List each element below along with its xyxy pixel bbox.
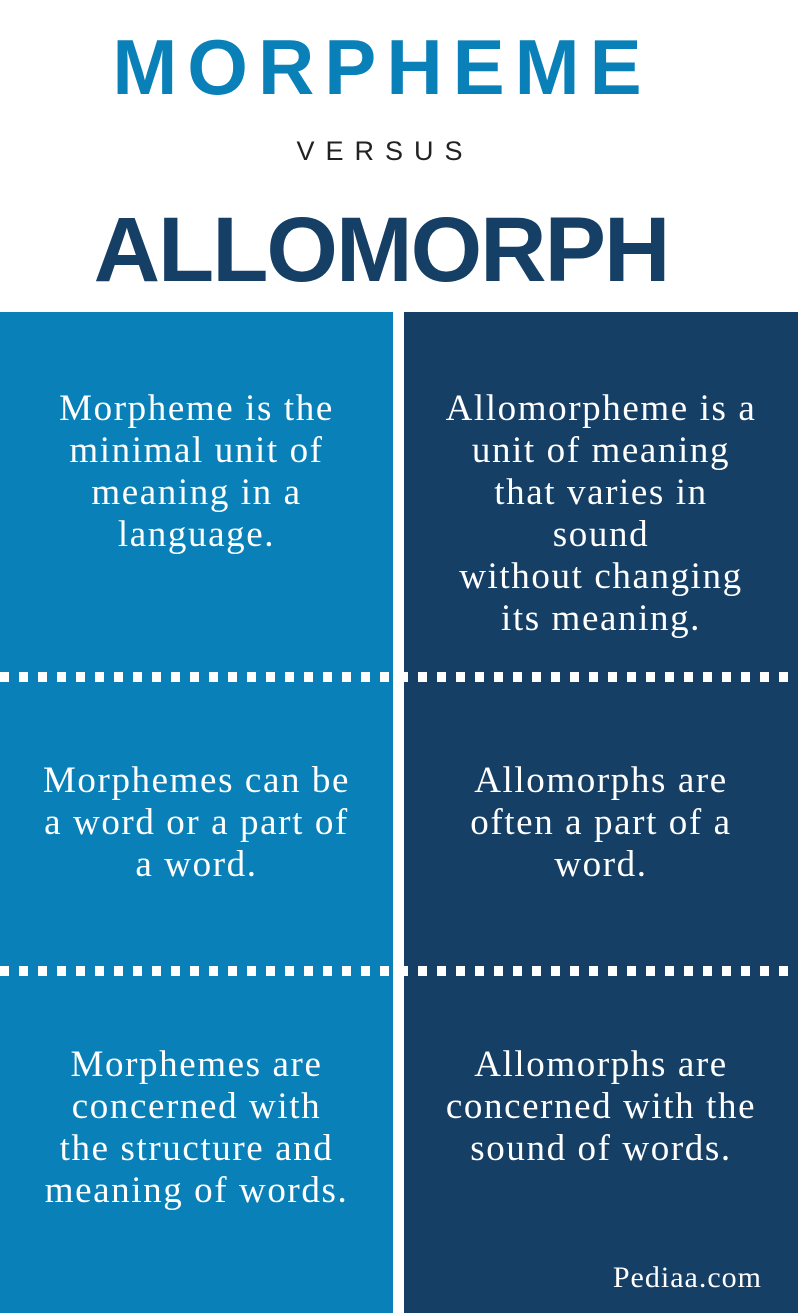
text: allomorph concern [446, 1044, 756, 1169]
text: allomorph definition: sound [553, 514, 649, 555]
text: morpheme concern: the structure and [60, 1128, 333, 1169]
text: morpheme concern [45, 1044, 348, 1211]
text: morpheme concern: meaning of words. [45, 1170, 348, 1211]
text: allomorph concern: concerned with the [446, 1086, 756, 1127]
text: allomorph definition: its meaning. [501, 598, 701, 639]
text: morpheme word: Morphemes can be [43, 760, 350, 801]
text: allomorph definition: that varies in [494, 472, 708, 513]
text: morpheme definition: meaning in a [91, 472, 302, 513]
text: allomorph definition: unit of meaning [472, 430, 730, 471]
text: allomorph definition: Allomorpheme is a [446, 388, 756, 429]
text: allomorph concern: sound of words. [470, 1128, 732, 1169]
title: morpheme: MORPHEME [112, 23, 652, 111]
text: morpheme word [43, 760, 350, 885]
title: allomorph: ALLOMORPH [94, 199, 668, 301]
text: morpheme concern: concerned with [72, 1086, 321, 1127]
text: morpheme concern: Morphemes are [71, 1044, 322, 1085]
versus: VERSUS [296, 136, 474, 166]
text: allomorph concern: Allomorphs are [474, 1044, 728, 1085]
text: allomorph word [470, 760, 732, 885]
text: allomorph definition: without changing [459, 556, 743, 597]
text: morpheme definition: language. [118, 514, 275, 555]
text: morpheme word: a word. [135, 844, 258, 885]
text: morpheme word: a word or a part of [44, 802, 349, 843]
text: allomorph definition [446, 388, 756, 639]
panel: allomorph column [404, 312, 798, 1313]
text: allomorph word: often a part of a [470, 802, 732, 843]
logo: pediaa: Pediaa.com [613, 1261, 762, 1294]
text: morpheme definition: Morpheme is the [59, 388, 334, 429]
panel: morpheme column [0, 312, 393, 1313]
text: allomorph word: word. [554, 844, 648, 885]
text: morpheme definition: minimal unit of [69, 430, 324, 471]
text: allomorph word: Allomorphs are [474, 760, 728, 801]
text: morpheme definition [59, 388, 334, 555]
